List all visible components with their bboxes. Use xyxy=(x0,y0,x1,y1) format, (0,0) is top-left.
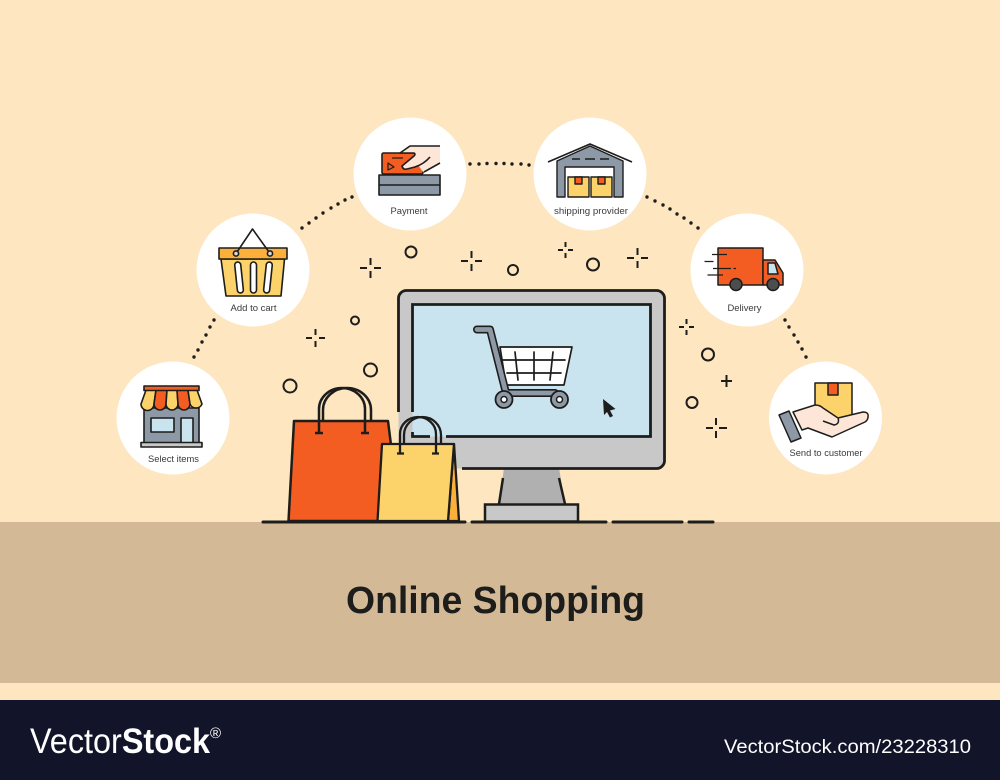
icon: shopping cart xyxy=(477,330,572,408)
icon: card and terminal xyxy=(379,146,440,195)
icon: store xyxy=(141,386,202,447)
footer logo: VectorStock xyxy=(30,722,210,761)
circle: delivery xyxy=(690,214,804,326)
circle: shipping provider xyxy=(534,118,646,230)
footer image id: VectorStock.com/23228310 xyxy=(724,737,971,758)
monitor xyxy=(398,290,665,522)
label: select items: Select items xyxy=(148,454,200,464)
icon: basket xyxy=(219,229,287,296)
footer bar xyxy=(0,700,1000,780)
dotted connectors xyxy=(192,162,808,359)
icon: truck xyxy=(704,248,783,290)
monitor screen xyxy=(412,304,650,436)
circle: select items xyxy=(116,362,230,474)
shopping bags xyxy=(288,388,459,521)
label: add to cart: Add to cart xyxy=(230,303,277,313)
floor band xyxy=(0,522,1000,683)
label: shipping provider: shipping provider xyxy=(554,206,628,216)
yellow bag xyxy=(378,417,459,521)
title: Online Shopping xyxy=(346,580,645,622)
decorative sparkles and rings xyxy=(284,242,732,438)
label: payment: Payment xyxy=(390,206,428,216)
footer registered mark: ® xyxy=(210,725,221,742)
orange bag xyxy=(288,388,391,521)
icon: hand with parcel xyxy=(779,383,868,442)
icon: warehouse xyxy=(548,144,632,197)
monitor bezel xyxy=(398,290,664,468)
circle: add to cart xyxy=(196,214,310,326)
icon: mouse pointer xyxy=(603,399,616,418)
label: delivery: Delivery xyxy=(728,303,762,313)
circle: payment xyxy=(354,118,466,230)
monitor stand xyxy=(499,468,565,504)
label: send to customer: Send to customer xyxy=(790,448,862,458)
circle: send to customer xyxy=(769,362,882,474)
floor line xyxy=(263,520,713,524)
